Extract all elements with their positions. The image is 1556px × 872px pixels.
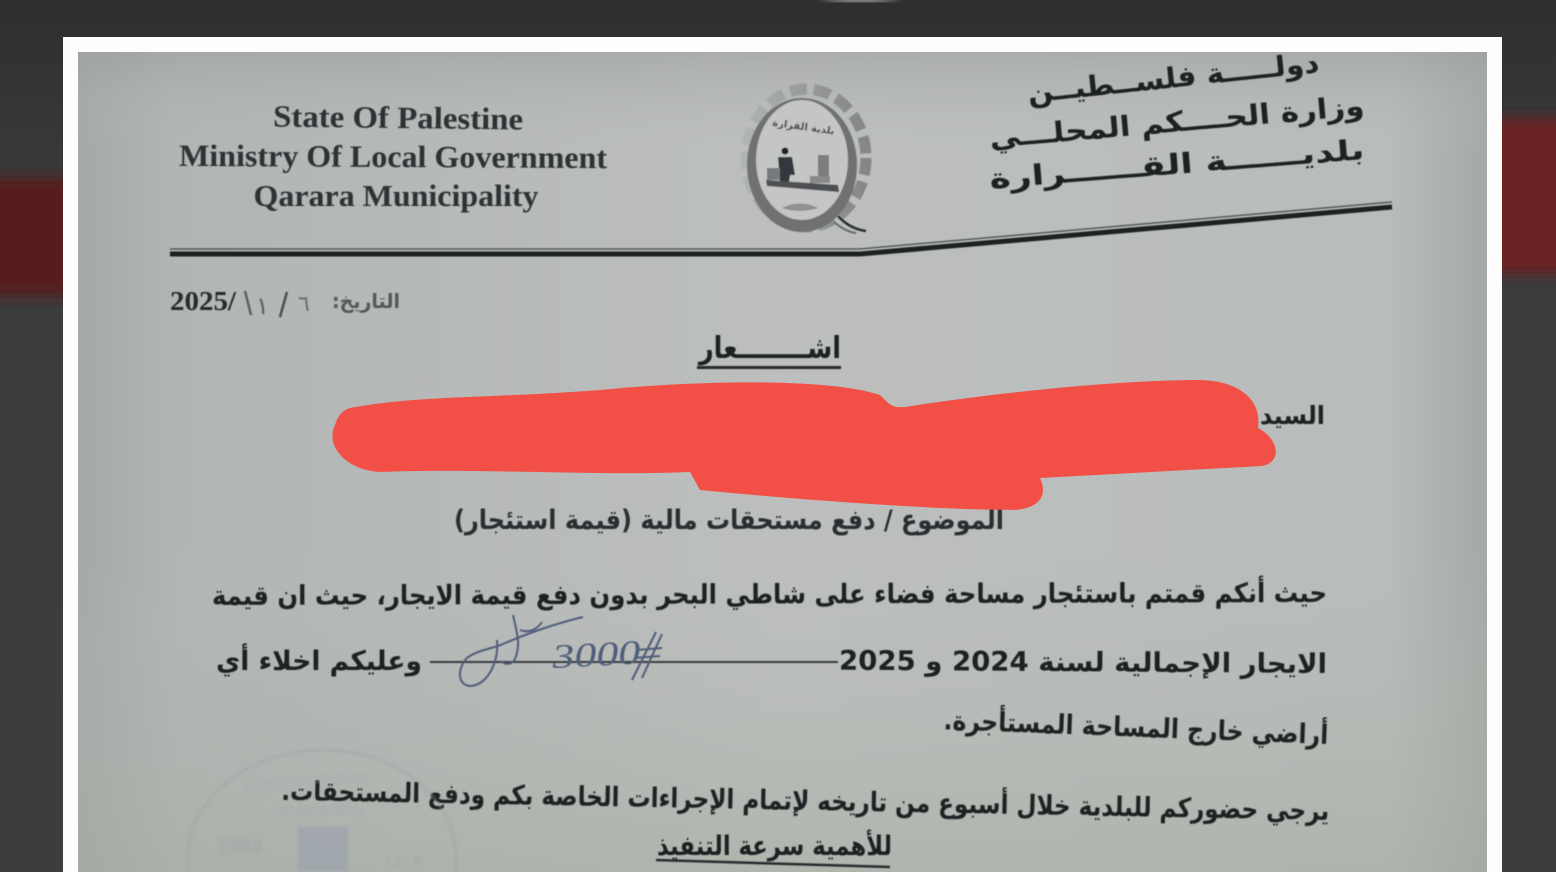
body text: حيث أنكم قمتم باستئجار مساحة فضاء على شاطي البحر بدون دفع قيمة الايجار، حيث ان قيمة [212,575,1327,612]
footer urgency note: للأهمية سرعة التنفيذ [657,829,892,862]
heading: Arabic letterhead: وزارة الحــــكم المحلـــي [988,89,1366,155]
heading: Arabic letterhead: دولـــــة فلســطيــن [1026,46,1321,110]
heading: Arabic letterhead [988,46,1366,195]
handwritten amount [460,615,662,686]
body text: وعليكم اخلاء أي [216,643,422,677]
body text [212,575,1330,827]
heading: notice title: اشــــــــعار [697,331,841,366]
date line: التاريخ: [332,289,400,313]
body text: يرجي حضوركم للبلدية خلال أسبوع من تاريخه لإتمام الإجراءات الخاصة بكم ودفع المستحقات. [281,773,1330,827]
body text: أراضي خارج المساحة المستأجرة. [943,702,1329,751]
heading: English letterhead: State Of Palestine [273,98,523,137]
handwritten amount: 3000 [550,634,641,676]
date line: ١ [256,292,269,320]
heading: English letterhead: Ministry Of Local Government [179,138,608,175]
header divider rule [170,202,1392,254]
heading: Arabic letterhead: بلديــــــة القــــــرارة [988,133,1366,195]
stamp: faded official seal: 2983 [218,836,262,858]
date line: 2025/ [170,286,237,316]
addressee label: السيد [1260,401,1325,430]
heading: English letterhead: Qarara Municipality [254,178,539,213]
date line [170,286,400,320]
stamp: faded official seal: ١٤٠٣ [384,852,423,872]
redaction: red scribble over name [332,380,1276,510]
subject line: الموضوع / دفع مستحقات مالية (قيمة استئجار) [454,505,1004,536]
body text: الايجار الإجمالية لسنة 2024 و 2025 [839,646,1327,680]
date line: ٦ [298,292,310,317]
icon: municipality gear logo: بلدية القرارة [772,118,835,137]
stamp: faded official seal [187,750,456,872]
heading: English letterhead [179,98,608,213]
icon: municipality gear logo [746,89,866,233]
